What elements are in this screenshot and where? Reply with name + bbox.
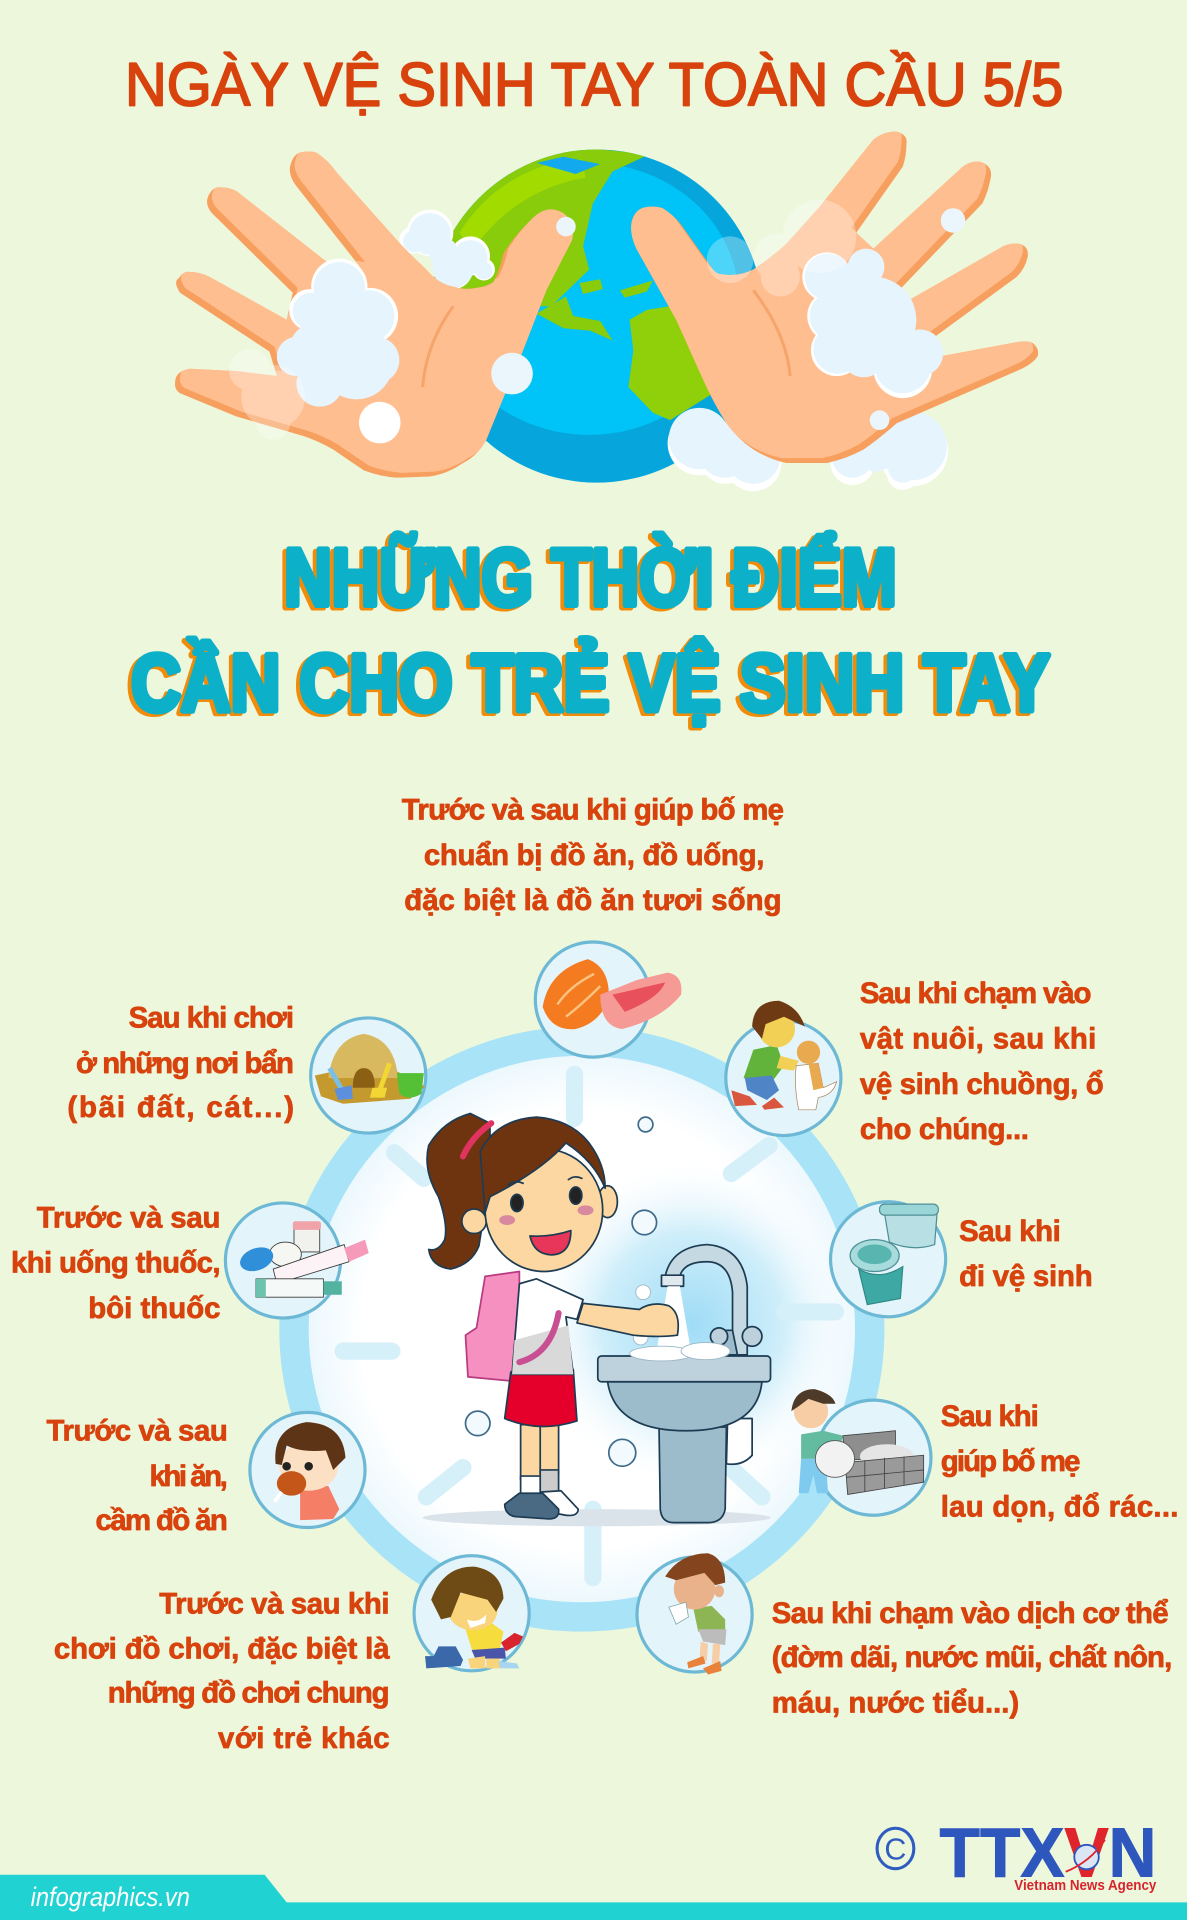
foam in sink: [630, 1285, 730, 1361]
footer bar: [0, 1875, 1187, 1920]
text: before and after medicine: bôi thuốc: [88, 1292, 221, 1325]
floating bubbles: [465, 1117, 657, 1466]
illustration: hands washing around the globe: [159, 122, 1060, 491]
text: before and after preparing food: đặc biệt là đồ ăn tươi sống: [404, 884, 782, 917]
text: before and after preparing food: chuẩn bị đồ ăn, đồ uống,: [424, 839, 764, 872]
text: after touching body fluids: [772, 1597, 1172, 1719]
heading text: CẦN CHO TRẺ VỆ SINH TAY: [131, 636, 1050, 728]
title: NGÀY VỆ SINH TAY TOÀN CẦU 5/5: [125, 50, 1063, 118]
skirt: [505, 1370, 577, 1427]
foam on right palm: [802, 249, 943, 398]
eyes and cheeks: [499, 1177, 594, 1225]
arm and hand: [577, 1303, 678, 1336]
icon: globe: [434, 150, 756, 483]
text: after touching pets: vệ sinh chuồng, ổ: [860, 1068, 1104, 1101]
icon circle: food: [535, 942, 681, 1057]
backpack strap: [519, 1313, 559, 1362]
heading text: NHỮNG THỜI ĐIỂM: [284, 532, 897, 623]
agency globe mark: [1066, 1840, 1105, 1872]
text: before and after playing with toys: chơi đồ chơi, đặc biệt là: [54, 1633, 390, 1666]
text: after touching pets: [860, 977, 1104, 1146]
hair band: [463, 1123, 491, 1156]
heading: [127, 532, 1050, 731]
text: after touching body fluids: (đờm dãi, nước mũi, chất nôn,: [772, 1641, 1172, 1674]
mouth: [530, 1231, 571, 1255]
icon: left hand: [175, 152, 573, 478]
agency name: Vietnam News Agency: [1014, 1878, 1157, 1894]
ponytail: [427, 1113, 490, 1269]
hair: [480, 1117, 605, 1213]
heading shadow: [127, 535, 1046, 731]
text: before and after playing with toys: với trẻ khác: [218, 1722, 390, 1755]
backpack: [465, 1272, 519, 1382]
soap bubbles: [359, 208, 965, 443]
text: after playing in dirty places: (bãi đất, cát...): [67, 1091, 294, 1124]
text: after using toilet: đi vệ sinh: [959, 1260, 1093, 1293]
text: before and after medicine: [11, 1201, 221, 1325]
text: after touching pets: vật nuôi, sau khi: [860, 1023, 1096, 1056]
text: before and after eating: [47, 1415, 228, 1537]
text: before and after playing with toys: [54, 1587, 390, 1755]
text: after playing in dirty places: Sau khi chơi: [129, 1002, 294, 1035]
foam on left palm: [277, 258, 399, 407]
text: after cleaning and taking out trash: Sau khi: [941, 1400, 1039, 1433]
legs and shoes: [505, 1425, 578, 1519]
text: before and after medicine: khi uống thuốc,: [11, 1247, 221, 1280]
agency wordmark: TTXVN: [940, 1814, 1156, 1892]
shirt: [512, 1279, 583, 1374]
copyright mark: [877, 1828, 914, 1869]
foam below right hand: [668, 408, 948, 491]
head: [485, 1149, 603, 1272]
text: after cleaning and taking out trash: giúp bố mẹ: [941, 1445, 1080, 1478]
foam behind left hand: [399, 209, 495, 289]
icon circle: toilet: [831, 1202, 946, 1317]
text: after touching body fluids: máu, nước tiểu...): [772, 1686, 1019, 1719]
text: before and after preparing food: Trước và sau khi giúp bố mẹ: [402, 793, 784, 826]
text: before and after eating: khi ăn,: [149, 1460, 228, 1493]
copyright mark: C: [884, 1832, 906, 1866]
text: after using toilet: Sau khi: [959, 1215, 1061, 1248]
text: before and after eating: cầm đồ ăn: [96, 1504, 228, 1537]
text: after cleaning and taking out trash: [941, 1400, 1178, 1523]
ears: [462, 1186, 617, 1234]
text: before and after medicine: Trước và sau: [37, 1201, 221, 1234]
text: after playing in dirty places: ở những nơi bẩn: [76, 1047, 294, 1080]
logo: copyright and TTXVN: [877, 1814, 1157, 1894]
icon: right hand: [631, 132, 1038, 463]
icon circle: playing in dirt: [311, 1018, 426, 1133]
footer text: infographics.vn: [31, 1882, 190, 1912]
text: after touching body fluids: Sau khi chạm vào dịch cơ thể: [772, 1597, 1169, 1630]
heading shadow: NHỮNG THỜI ĐIỂM: [281, 535, 893, 626]
sink: [598, 1356, 771, 1523]
illustration: girl washing hands at sink: [423, 1113, 771, 1526]
text: before and after playing with toys: Trước và sau khi: [159, 1587, 390, 1620]
text: after using toilet: [959, 1215, 1093, 1293]
icon circle: eating: [250, 1412, 365, 1528]
text: after cleaning and taking out trash: lau dọn, đổ rác...: [941, 1490, 1178, 1523]
icon circle: toys: [414, 1556, 529, 1671]
text: before and after playing with toys: những đồ chơi chung: [108, 1677, 390, 1710]
text: before and after eating: Trước và sau: [47, 1415, 228, 1448]
icon circle: trash: [791, 1389, 931, 1515]
text: after playing in dirty places: [67, 1002, 294, 1124]
text: before and after preparing food: [402, 793, 784, 917]
icon circle: pet: [726, 1001, 841, 1136]
icon circle: bodily fluids: [637, 1553, 752, 1675]
text: after touching pets: Sau khi chạm vào: [860, 977, 1091, 1010]
heading text: [131, 532, 1050, 728]
ring panel: [294, 1041, 870, 1617]
icon circle: medicine: [225, 1203, 369, 1318]
heading shadow: CẦN CHO TRẺ VỆ SINH TAY: [127, 639, 1046, 731]
ground shadow: [423, 1509, 771, 1526]
translucent foam over fingers: [229, 200, 856, 440]
faucet: [657, 1245, 762, 1355]
text: after touching pets: cho chúng...: [860, 1113, 1029, 1146]
